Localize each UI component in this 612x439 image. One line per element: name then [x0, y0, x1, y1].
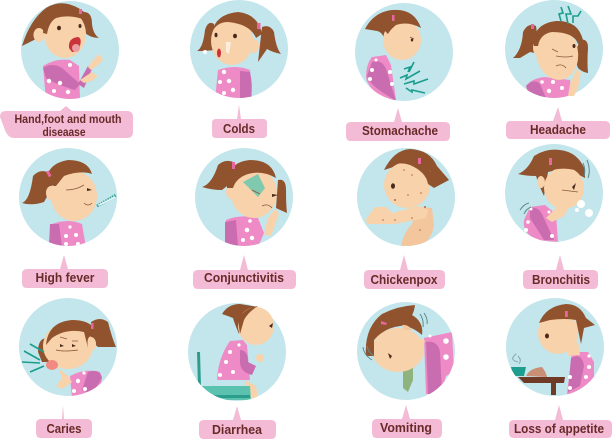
label: Hand, foot and mouth disease: Hand,foot and mouth — [14, 114, 122, 126]
icon: shirtless girl with spots — [357, 148, 455, 246]
panel: Stomachache — [346, 3, 453, 141]
icon: girl with runny nose — [190, 0, 288, 100]
icon: girl with open mouth and sore hands — [21, 1, 119, 100]
panel: Vomiting — [357, 302, 455, 438]
icon: girl holding head with pain lines — [505, 0, 603, 98]
panel: Caries — [19, 298, 117, 438]
icon: girl with thermometer in mouth — [19, 148, 117, 247]
label: Hand, foot and mouth disease: diseaase — [42, 127, 86, 139]
panel: Diarrhea — [188, 303, 286, 439]
icon: girl with toothache — [19, 298, 117, 398]
label: Bronchitis — [523, 255, 598, 289]
icon: girl vomiting — [357, 302, 455, 400]
panel: High fever — [19, 148, 117, 288]
label: Conjunctivitis: Conjunctivitis — [204, 271, 284, 285]
panel: Headache — [505, 0, 610, 139]
panel: Bronchitis — [505, 144, 603, 289]
panel: Conjunctivitis — [193, 148, 296, 289]
panel: Chickenpox — [357, 148, 455, 289]
label: Hand, foot and mouth disease — [0, 106, 133, 139]
icon: girl with sore eye — [195, 148, 293, 247]
label: Caries: Caries — [46, 422, 82, 436]
icon: girl on toilet — [188, 303, 286, 401]
panel: Hand, foot and mouth disease — [0, 1, 133, 139]
icon: girl holding stomach with pain lines — [355, 3, 453, 101]
label: Stomachache: Stomachache — [362, 124, 438, 138]
label: Chickenpox — [364, 255, 445, 289]
label: Conjunctivitis — [193, 255, 296, 289]
label: Headache: Headache — [530, 123, 586, 137]
label: Colds: Colds — [223, 122, 255, 136]
label: High fever: High fever — [36, 271, 95, 285]
label: Bronchitis: Bronchitis — [532, 273, 590, 287]
label: Chickenpox: Chickenpox — [370, 273, 438, 287]
panel: Loss of appetite — [506, 298, 612, 438]
label: Loss of appetite: Loss of appetite — [514, 422, 604, 436]
label: Vomiting: Vomiting — [380, 421, 432, 435]
icon: girl refusing food at table — [506, 298, 604, 396]
panel: Colds — [190, 0, 288, 138]
label: Diarrhea: Diarrhea — [212, 423, 263, 437]
icon: coughing girl — [505, 144, 603, 242]
